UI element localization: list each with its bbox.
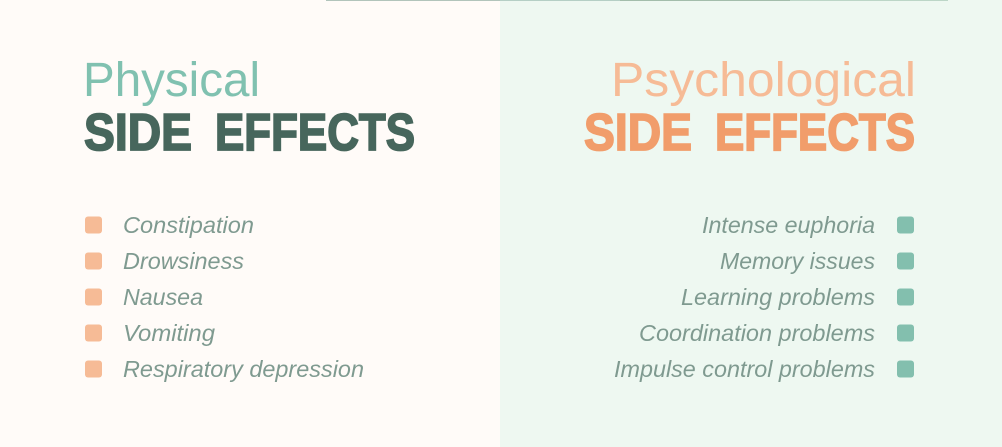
heading: Psychological: Psychological (611, 54, 916, 107)
heading: Physical: Physical (83, 54, 260, 107)
list item: Nausea: Nausea (123, 284, 203, 310)
list item: Memory issues: Memory issues (720, 248, 875, 274)
heading: SIDE EFFECTS: EFFECTS (215, 104, 415, 162)
list: psychological effects (614, 212, 914, 382)
list: physical effects (85, 212, 364, 382)
heading: SIDE EFFECTS (584, 104, 915, 162)
list item: Impulse control problems: Impulse control problems (614, 356, 875, 382)
heading: SIDE EFFECTS: SIDE (84, 104, 192, 162)
panel: psychological side effects (500, 0, 1002, 447)
list item: Intense euphoria: Intense euphoria (702, 212, 875, 238)
list item: Vomiting: Vomiting (123, 320, 215, 346)
heading: SIDE EFFECTS: SIDE (584, 104, 692, 162)
heading: SIDE EFFECTS (84, 104, 415, 162)
heading: SIDE EFFECTS: EFFECTS (715, 104, 915, 162)
list item: Vomiting (85, 320, 215, 346)
list item: Learning problems: Learning problems (681, 284, 875, 310)
list item: Drowsiness: Drowsiness (123, 248, 244, 274)
list item: Respiratory depression: Respiratory depression (123, 356, 364, 382)
panel: physical side effects (0, 0, 500, 447)
list item: Nausea (85, 284, 203, 310)
list item: Coordination problems: Coordination problems (639, 320, 876, 346)
list item: Constipation: Constipation (123, 212, 254, 238)
